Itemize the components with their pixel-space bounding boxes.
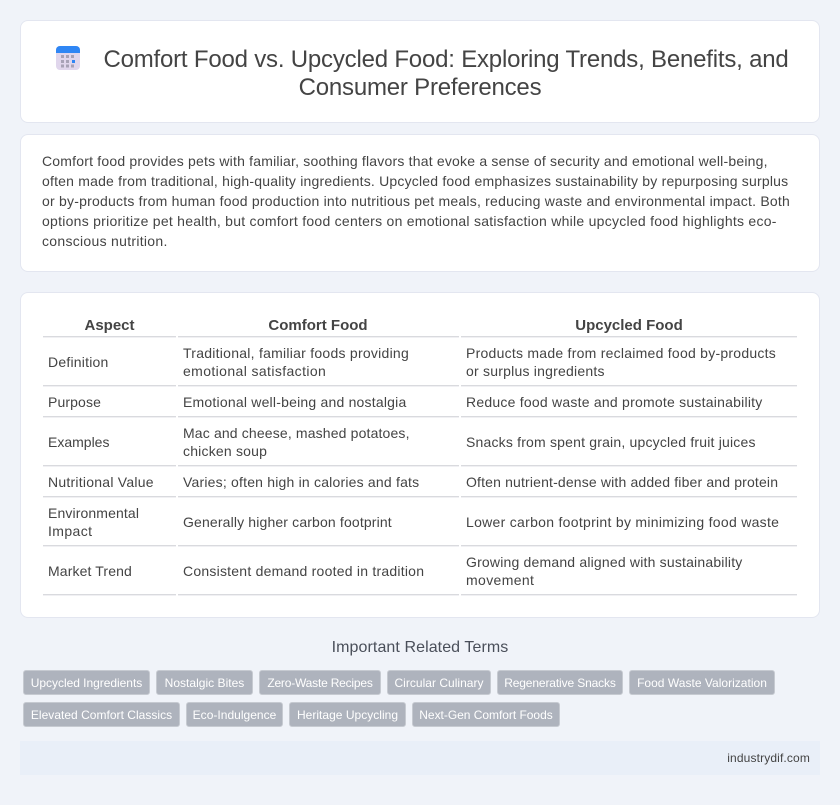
row: environmental impact: Environmental bbox=[48, 505, 139, 521]
panel: intro card bbox=[20, 134, 820, 272]
text: Varies; often high in calories and fats bbox=[183, 474, 419, 490]
panel: header card bbox=[20, 20, 820, 123]
panel: comparison table bbox=[20, 292, 820, 618]
text: emotional satisfaction bbox=[183, 363, 326, 379]
text: Often nutrient-dense with added fiber and protein bbox=[466, 474, 778, 490]
intro text: Comfort food provides pets with familiar, soothing flavors that evoke a sense of security and emotional well-being, bbox=[42, 153, 768, 169]
intro text: options prioritize pet health, but comfort food centers on emotional satisfaction while upcycled food highlights eco- bbox=[42, 213, 777, 229]
text: Consistent demand rooted in tradition bbox=[183, 563, 424, 579]
table headers: Aspect bbox=[84, 317, 135, 334]
text: Lower carbon footprint by minimizing food waste bbox=[466, 514, 779, 530]
title bbox=[103, 46, 789, 101]
footer bar bbox=[20, 741, 820, 775]
text: Reduce food waste and promote sustainability bbox=[466, 394, 763, 410]
text: movement bbox=[466, 572, 534, 588]
row: examples: Examples bbox=[48, 434, 109, 450]
icon: calendar bbox=[56, 46, 80, 70]
text: Products made from reclaimed food by-products bbox=[466, 345, 776, 361]
intro text: conscious nutrition. bbox=[42, 233, 168, 249]
footer source: industrydif.com bbox=[727, 751, 810, 765]
text: Mac and cheese, mashed potatoes, bbox=[183, 425, 410, 441]
row: purpose: Purpose bbox=[48, 394, 101, 410]
tags: related terms: Nostalgic Bites bbox=[165, 676, 244, 690]
tags: related terms: Heritage Upcycling bbox=[297, 708, 398, 722]
tags: related terms: Next-Gen Comfort Foods bbox=[419, 708, 553, 722]
title: Consumer Preferences bbox=[299, 74, 541, 101]
table headers: Comfort Food bbox=[268, 317, 368, 334]
table headers bbox=[84, 317, 683, 334]
title: Comfort Food vs. Upcycled Food: Exploring Trends, Benefits, and bbox=[103, 46, 789, 73]
row: environmental impact: Impact bbox=[48, 523, 92, 539]
intro text: often made from traditional, high-quality ingredients. Upcycled food emphasizes sustainability by repurposing surplus bbox=[42, 173, 788, 189]
text: Generally higher carbon footprint bbox=[183, 514, 392, 530]
text: Emotional well-being and nostalgia bbox=[183, 394, 406, 410]
text: or surplus ingredients bbox=[466, 363, 605, 379]
tags: related terms: Regenerative Snacks bbox=[504, 676, 616, 690]
text: Growing demand aligned with sustainability bbox=[466, 554, 742, 570]
heading: related terms: Important Related Terms bbox=[332, 639, 508, 656]
row: definition: Definition bbox=[48, 354, 109, 370]
text: chicken soup bbox=[183, 443, 267, 459]
tags: related terms: Elevated Comfort Classics bbox=[31, 708, 172, 722]
row: nutritional value: Nutritional Value bbox=[48, 474, 154, 490]
tags: related terms: Circular Culinary bbox=[394, 676, 484, 690]
intro text bbox=[42, 153, 790, 249]
table headers: Upcycled Food bbox=[575, 317, 683, 334]
text: Traditional, familiar foods providing bbox=[183, 345, 409, 361]
row: market trend: Market Trend bbox=[48, 563, 132, 579]
intro text: or by-products from human food production into nutritious pet meals, reducing waste and environmental impact. Both bbox=[42, 193, 790, 209]
tags: related terms: Zero-Waste Recipes bbox=[267, 676, 373, 690]
row: environmental impact bbox=[48, 505, 139, 539]
text: Snacks from spent grain, upcycled fruit juices bbox=[466, 434, 756, 450]
tags: related terms: Upcycled Ingredients bbox=[31, 676, 142, 690]
tags: related terms: Eco-Indulgence bbox=[193, 708, 276, 722]
tags: related terms: Food Waste Valorization bbox=[637, 676, 767, 690]
